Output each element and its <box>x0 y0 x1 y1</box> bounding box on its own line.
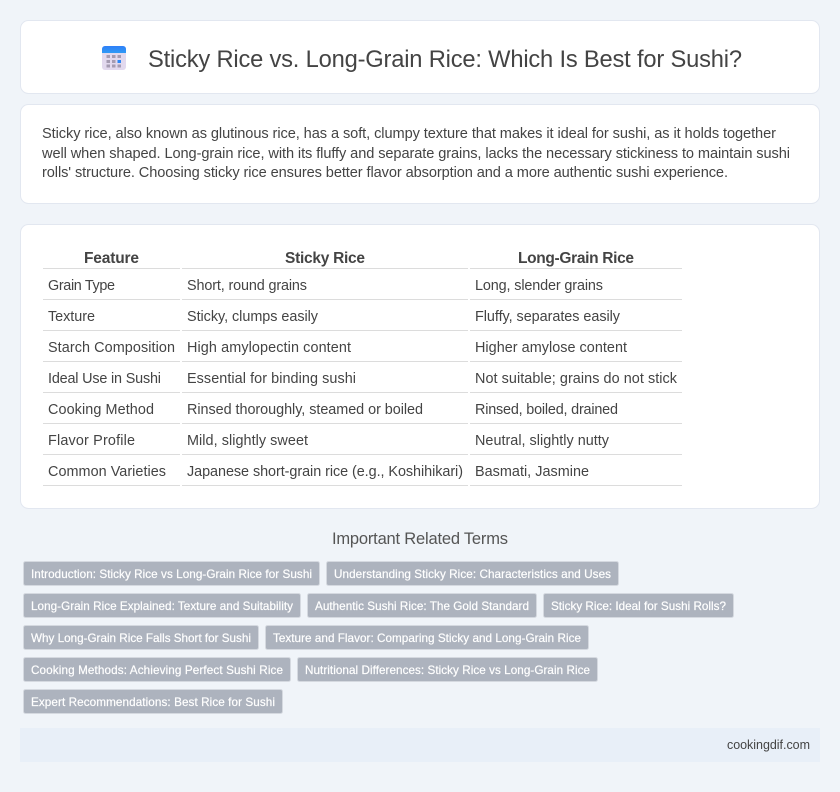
row: common varieties: Basmati, Jasmine <box>475 464 589 480</box>
text block: introduction: rolls' structure. Choosing sticky rice ensures better flavor absorption and a more authentic sushi experience. <box>42 165 728 181</box>
tag: Introduction: Sticky Rice vs Long-Grain Rice for Sushi <box>31 568 312 581</box>
row: flavor profile: Flavor Profile <box>48 433 135 449</box>
footer <box>20 728 820 762</box>
row: texture: Fluffy, separates easily <box>475 309 621 325</box>
table header <box>84 250 634 267</box>
row: starch composition: Starch Composition <box>48 340 175 356</box>
row: ideal use in sushi: Essential for binding sushi <box>187 371 356 387</box>
row: texture: Texture <box>48 309 95 325</box>
table header: Sticky Rice <box>285 250 365 267</box>
tags: related terms <box>24 562 734 714</box>
tag: Sticky Rice: Ideal for Sushi Rolls? <box>551 600 726 613</box>
tag: Understanding Sticky Rice: Characteristics and Uses <box>334 568 611 581</box>
row: common varieties: Common Varieties <box>48 464 166 480</box>
tag <box>326 562 618 586</box>
tag: Expert Recommendations: Best Rice for Sushi <box>31 696 275 709</box>
tag <box>24 690 282 714</box>
title: Sticky Rice vs. Long-Grain Rice: Which Is Best for Sushi? <box>148 47 742 73</box>
row: cooking method: Rinsed thoroughly, steamed or boiled <box>187 402 423 418</box>
row: texture: Sticky, clumps easily <box>187 309 319 325</box>
tag: Nutritional Differences: Sticky Rice vs Long-Grain Rice <box>305 664 590 677</box>
table header: Long-Grain Rice <box>518 250 634 267</box>
row: grain type: Grain Type <box>48 278 115 294</box>
tag: Why Long-Grain Rice Falls Short for Sushi <box>31 632 251 645</box>
tag <box>24 562 320 586</box>
panel: comparison table <box>20 224 820 508</box>
panel: title header <box>20 20 820 94</box>
tag: Texture and Flavor: Comparing Sticky and Long-Grain Rice <box>273 632 581 645</box>
row: flavor profile <box>48 433 610 449</box>
row: common varieties: Japanese short-grain rice (e.g., Koshihikari) <box>187 464 463 480</box>
row: starch composition <box>48 340 627 356</box>
tag <box>544 594 734 618</box>
tag <box>24 594 300 618</box>
text block: introduction: Sticky rice, also known as glutinous rice, has a soft, clumpy texture that makes it ideal for sushi, as it holds together <box>42 126 776 142</box>
tag <box>308 594 536 618</box>
icon: calendar <box>102 46 126 70</box>
tag <box>24 626 258 650</box>
row: flavor profile: Neutral, slightly nutty <box>475 433 610 449</box>
tag <box>24 658 290 682</box>
text block: introduction: well when shaped. Long-grain rice, with its fluffy and separate grains, lacks the necessary stickiness to maintain sushi <box>41 146 790 162</box>
row: ideal use in sushi <box>48 371 678 387</box>
row: texture <box>48 309 621 325</box>
panel: introduction <box>20 104 820 204</box>
row: common varieties <box>48 464 589 480</box>
tag: Long-Grain Rice Explained: Texture and Suitability <box>31 600 293 613</box>
row: starch composition: Higher amylose content <box>475 340 627 356</box>
table header: Feature <box>84 250 139 267</box>
row: starch composition: High amylopectin content <box>187 340 351 356</box>
row: ideal use in sushi: Ideal Use in Sushi <box>48 371 161 387</box>
tag: Authentic Sushi Rice: The Gold Standard <box>315 600 529 613</box>
tag <box>298 658 598 682</box>
row: grain type <box>48 278 603 294</box>
footer source: cookingdif.com <box>727 738 810 752</box>
row: ideal use in sushi: Not suitable; grains do not stick <box>475 371 678 387</box>
heading: related terms: Important Related Terms <box>332 530 508 548</box>
row: grain type: Short, round grains <box>187 278 307 294</box>
row: cooking method <box>48 402 618 418</box>
tag <box>266 626 588 650</box>
row: grain type: Long, slender grains <box>475 278 603 294</box>
text block: introduction <box>41 126 790 181</box>
row: cooking method: Cooking Method <box>48 402 154 418</box>
row: cooking method: Rinsed, boiled, drained <box>475 402 618 418</box>
tag: Cooking Methods: Achieving Perfect Sushi Rice <box>31 664 283 677</box>
row: flavor profile: Mild, slightly sweet <box>187 433 308 449</box>
